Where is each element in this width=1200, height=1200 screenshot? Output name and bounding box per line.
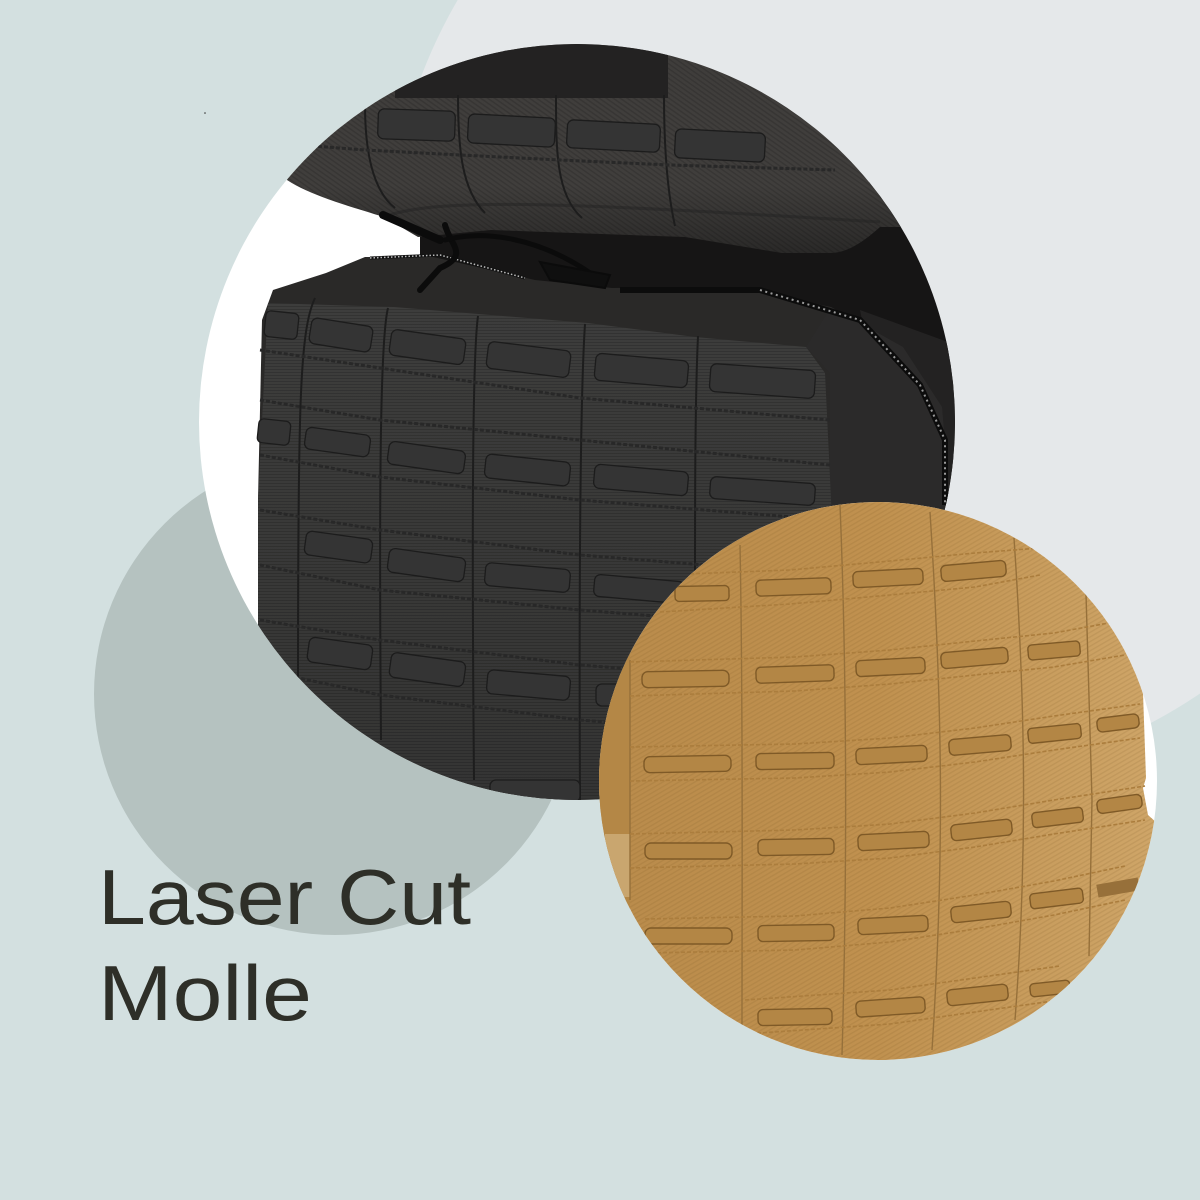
title line 1: Laser Cut	[98, 853, 471, 941]
webbing stitch rows	[260, 350, 830, 420]
flap seams	[365, 105, 395, 208]
photo circle: coyote tan laser cut panel	[590, 495, 1165, 1070]
webbing tab	[605, 834, 630, 897]
pack body top panel	[258, 257, 950, 810]
left strap edge	[599, 654, 630, 908]
pack side panel	[946, 490, 949, 506]
zipper cord and knot	[383, 215, 610, 290]
velcro patch	[395, 44, 668, 98]
slot row 5	[645, 928, 732, 944]
shadowed gap behind flap	[420, 170, 970, 520]
title	[98, 853, 471, 1037]
flap stitching	[300, 145, 835, 170]
slot row 4	[645, 843, 732, 859]
right side dark panel beyond zipper	[860, 310, 955, 510]
background circle: light grey	[387, 0, 1200, 783]
background circle: sage	[94, 453, 576, 935]
slot row 3	[304, 531, 373, 564]
slot row 2	[257, 418, 291, 446]
slot row 1	[675, 586, 729, 601]
speck	[204, 112, 206, 114]
photo backdrop	[199, 91, 490, 790]
pack front panel	[257, 298, 832, 810]
top flap	[287, 44, 901, 253]
slot row 1	[264, 310, 299, 340]
slot row 6	[758, 1008, 832, 1026]
slot row 4	[307, 637, 373, 670]
photo circle: black laser cut pack	[190, 30, 970, 810]
flap slots	[377, 109, 455, 141]
title line 2: Molle	[98, 949, 312, 1037]
slot row 3	[644, 755, 731, 773]
stitch rows	[660, 575, 1040, 612]
zipper	[370, 255, 945, 505]
vertical seams	[629, 660, 631, 900]
front seams	[298, 298, 315, 680]
slot row 2	[642, 670, 729, 688]
slot row 5	[490, 780, 580, 802]
tan fabric	[590, 495, 1165, 1070]
dark strap	[1096, 877, 1140, 898]
white circle backing	[599, 502, 1157, 1060]
